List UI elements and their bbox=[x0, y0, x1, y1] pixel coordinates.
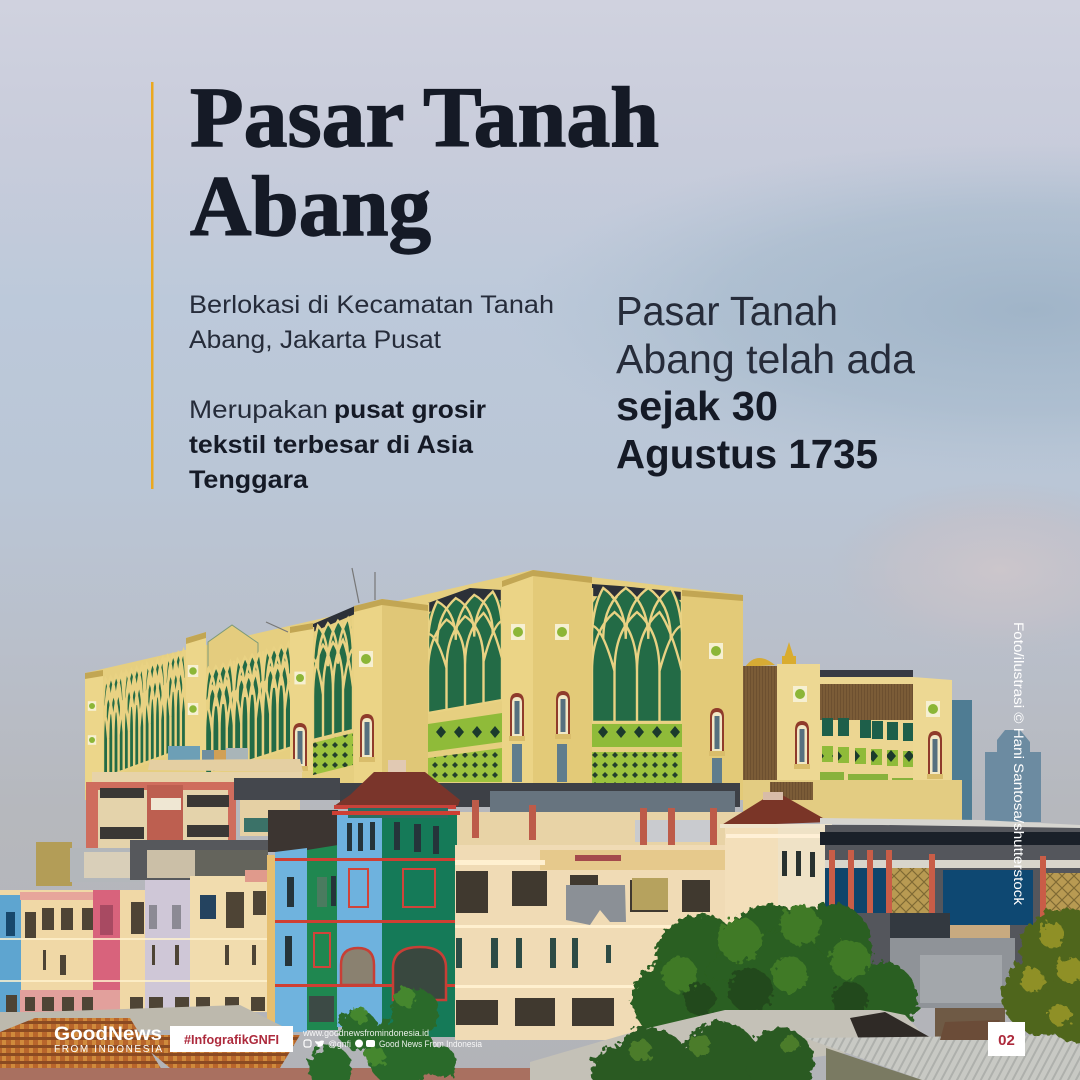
text block: location: Berlokasi di Kecamatan Tanah bbox=[189, 291, 554, 319]
window grid bbox=[6, 891, 266, 1012]
torn sheet bbox=[566, 885, 626, 925]
callout: founding date: sejak 30 bbox=[616, 383, 778, 429]
text block: wholesale centre: pusat grosir bbox=[334, 396, 486, 424]
lattice facades bbox=[103, 672, 124, 778]
text block: location bbox=[189, 291, 554, 354]
title: Abang bbox=[190, 158, 431, 254]
callout: founding date: Pasar Tanah bbox=[616, 288, 838, 334]
website and social handles: @gnfi bbox=[328, 1039, 351, 1049]
tower roof bbox=[334, 772, 460, 806]
left tree bbox=[308, 988, 456, 1080]
roof antenna bbox=[266, 568, 375, 632]
title: Pasar Tanah bbox=[190, 69, 659, 165]
hashtag badge bbox=[170, 1026, 293, 1052]
building mass bbox=[85, 570, 743, 800]
trees: foreground bbox=[308, 908, 1080, 1080]
logo: GoodNews from Indonesia bbox=[54, 1024, 162, 1055]
upper grey storey bbox=[130, 840, 268, 880]
icon: twitter bbox=[315, 1040, 324, 1047]
square ornaments bbox=[511, 624, 525, 640]
website and social handles bbox=[302, 1028, 482, 1049]
lower layer: back structures bbox=[36, 746, 745, 886]
colourful tower building bbox=[267, 760, 460, 1037]
rooftop water tanks bbox=[168, 746, 248, 764]
icon: facebook bbox=[355, 1040, 363, 1048]
logo: GoodNews from Indonesia: FROM INDONESIA bbox=[54, 1044, 162, 1055]
callout: founding date bbox=[616, 288, 915, 477]
right yellow-green tree bbox=[1002, 908, 1080, 1043]
rooftop slab bbox=[148, 759, 303, 772]
website and social handles: www.goodnewsfromindonesia.id bbox=[302, 1028, 429, 1038]
roof dark bbox=[313, 584, 682, 632]
annex building bbox=[743, 642, 962, 822]
photo: Pasar Tanah Abang main building bbox=[85, 568, 743, 800]
gold annex and grey block bbox=[36, 842, 72, 886]
text block: wholesale centre: Tenggara bbox=[189, 466, 309, 494]
colored shophouses row bbox=[0, 870, 267, 1012]
text block: wholesale centre bbox=[189, 396, 486, 494]
page number bbox=[988, 1022, 1025, 1056]
icon: instagram bbox=[304, 1040, 311, 1047]
logo: GoodNews from Indonesia: GoodNews bbox=[54, 1024, 162, 1045]
small cream tower bbox=[725, 825, 825, 930]
page number: 02 bbox=[998, 1032, 1015, 1049]
accent vertical line bbox=[151, 82, 154, 489]
tower faces bbox=[85, 670, 103, 790]
lime panels bbox=[313, 733, 353, 775]
grey roofs in front of centre tree bbox=[530, 1010, 1080, 1080]
text block: wholesale centre: Merupakan bbox=[189, 396, 328, 424]
green balcony bbox=[728, 862, 778, 927]
right dark market block bbox=[820, 818, 1080, 1038]
callout: founding date: Abang telah ada bbox=[616, 336, 915, 382]
hashtag badge: #InfografikGNFI bbox=[184, 1032, 279, 1047]
front tree bbox=[591, 1022, 814, 1080]
icon: youtube bbox=[366, 1040, 375, 1047]
callout: founding date: Agustus 1735 bbox=[616, 431, 878, 477]
rooftops background left bbox=[0, 1005, 540, 1080]
arched windows bbox=[509, 693, 525, 741]
salmon and cream building bbox=[92, 772, 302, 784]
title bbox=[190, 69, 659, 254]
text block: location: Abang, Jakarta Pusat bbox=[189, 326, 441, 354]
cornices bbox=[85, 570, 743, 679]
ledges bbox=[0, 938, 267, 982]
red banding bbox=[275, 811, 460, 987]
distant skyscrapers bbox=[952, 700, 1041, 822]
arched entrances bbox=[341, 948, 374, 985]
website and social handles: Good News From Indonesia bbox=[379, 1039, 482, 1049]
photo credit: Foto/ilustrasi © Hani Santosa/shutterstock bbox=[1011, 622, 1026, 905]
tree: big centre bbox=[632, 903, 918, 1070]
cream apartment building bbox=[455, 792, 832, 1040]
gable bbox=[208, 625, 258, 680]
text block: wholesale centre: tekstil terbesar di Asia bbox=[189, 431, 474, 459]
tower windows bbox=[285, 822, 439, 1022]
